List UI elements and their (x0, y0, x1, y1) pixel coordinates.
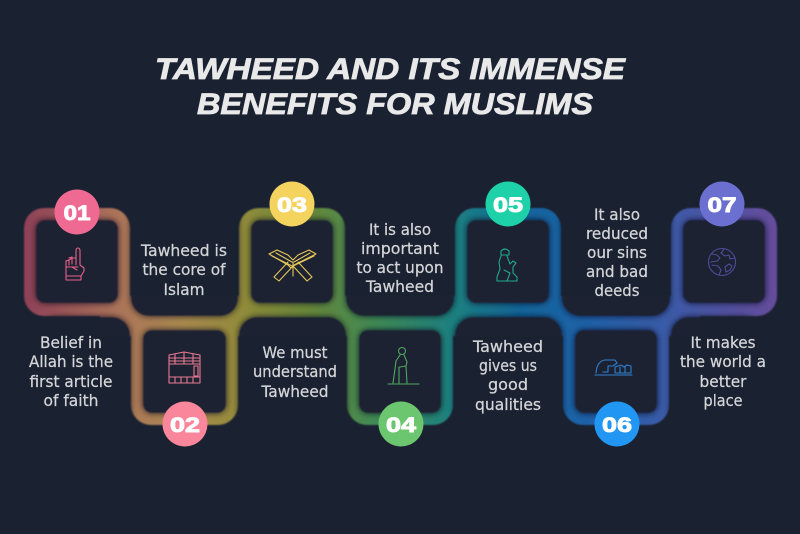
badge 02: 02 (170, 414, 200, 437)
badge 04 (378, 402, 424, 446)
text: qualities: good (488, 375, 528, 394)
text: understand (253, 343, 337, 401)
badge 06 (594, 402, 640, 446)
infographic canvas (23, 58, 778, 446)
gradient serpentine band with dark boxes (23, 207, 778, 426)
badge 01: 01 (64, 202, 91, 225)
text: belief: Belief in (40, 333, 102, 352)
icon: kneeling worshipper (497, 249, 517, 281)
badge 02 (162, 402, 208, 446)
text: act: to act upon (356, 258, 444, 277)
text: world: better (700, 372, 747, 391)
step 06 (586, 205, 648, 446)
text: understand: Tawheed (261, 382, 328, 401)
text: understand: We must (262, 343, 328, 362)
text: sins: reduced (586, 224, 648, 243)
step 01 (29, 190, 113, 410)
text: core: Islam (164, 280, 204, 299)
text: belief: of faith (44, 391, 98, 410)
icon: standing worshipper (388, 348, 419, 384)
badge 05 (486, 182, 530, 226)
step 05 (472, 182, 543, 414)
badge 01 (54, 190, 100, 234)
step 04 (356, 220, 444, 446)
text: qualities: qualities (475, 395, 541, 414)
icon: open quran on stand (269, 250, 316, 281)
icon: prostrating worshipper (595, 360, 632, 375)
icon: pointing hand (66, 248, 84, 280)
badge 05: 05 (493, 194, 523, 217)
text: sins: our sins (587, 243, 647, 262)
text: belief: Allah is the (29, 352, 113, 371)
text: qualities: Tawheed (472, 337, 543, 356)
title (155, 53, 626, 121)
step 07 (680, 182, 766, 410)
text: sins: and bad (586, 262, 648, 281)
badge 04: 04 (386, 414, 416, 437)
text: sins (586, 205, 648, 300)
badge 03: 03 (277, 194, 307, 217)
text: act: important (361, 239, 439, 258)
badge 07 (700, 182, 744, 226)
text: sins: deeds (594, 281, 640, 300)
text: act: It is also (369, 220, 431, 239)
text: act (356, 220, 444, 296)
step 03 (253, 182, 337, 401)
text: understand: understand (253, 362, 337, 381)
text: world: the world a (680, 352, 766, 371)
text: world: It makes (690, 333, 756, 352)
badge 03 (270, 182, 314, 226)
text: act: Tawheed (365, 277, 434, 296)
icon: globe (708, 248, 736, 276)
text: core (140, 241, 227, 299)
text: qualities (472, 337, 543, 414)
title: TAWHEED AND ITS IMMENSE (155, 53, 626, 86)
text: belief: first article (30, 372, 112, 391)
text: core: Tawheed is (140, 241, 227, 260)
text: sins: It also (594, 205, 640, 224)
title: BENEFITS FOR MUSLIMS (197, 88, 593, 121)
text: world (680, 333, 766, 410)
badge 07: 07 (708, 194, 736, 217)
badge 06: 06 (602, 414, 632, 437)
text: core: the core of (142, 260, 226, 279)
text: belief (29, 333, 113, 410)
text: qualities: gives us (479, 356, 537, 375)
text: world: place (704, 391, 742, 410)
icon: kaaba (169, 352, 200, 383)
step 02 (140, 241, 227, 446)
